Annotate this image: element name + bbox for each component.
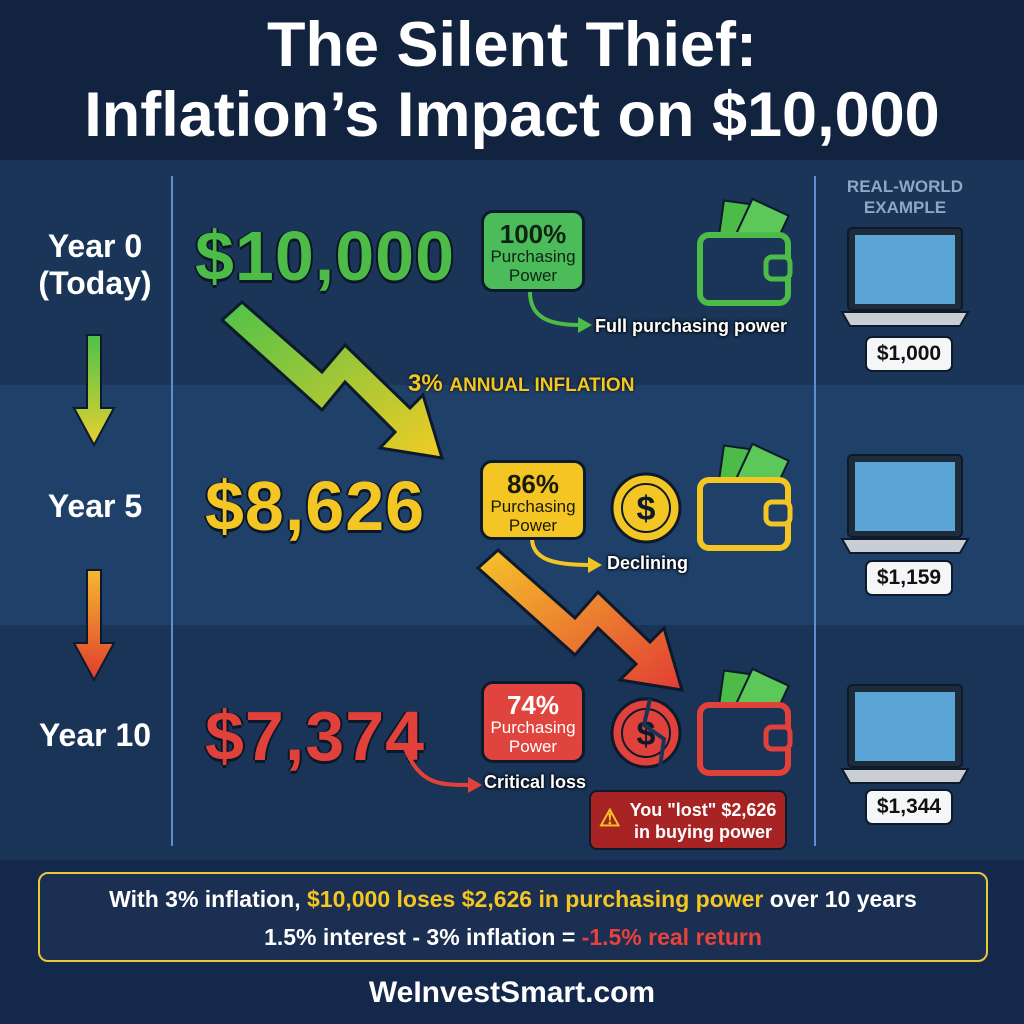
summary box: With 3% inflation, $10,000 loses $2,626 in purchasing power over 10 years bbox=[109, 886, 917, 912]
footer band bbox=[0, 860, 1024, 1024]
year labels: (Today) bbox=[38, 265, 152, 301]
footer brand: WeInvestSmart.com bbox=[369, 976, 655, 1009]
pp boxes: 100% bbox=[500, 219, 566, 249]
title bbox=[84, 10, 940, 150]
wallet icons bbox=[697, 198, 792, 306]
text: 74% bbox=[507, 690, 559, 720]
column heading: real-world example: EXAMPLE bbox=[864, 198, 946, 217]
header band bbox=[0, 0, 1024, 160]
text: Declining bbox=[607, 553, 688, 573]
price tags: $1,000 bbox=[877, 342, 941, 365]
text: Year 5 bbox=[48, 488, 142, 524]
title: Inflation’s Impact on $10,000 bbox=[84, 80, 940, 150]
text: $ bbox=[637, 715, 656, 753]
warning callout: in buying power bbox=[634, 822, 772, 842]
text: Power bbox=[509, 516, 557, 535]
pp boxes: Power bbox=[509, 266, 557, 285]
text: $1,159 bbox=[877, 566, 941, 589]
title: The Silent Thief: bbox=[267, 10, 757, 80]
pp boxes: Purchasing bbox=[490, 247, 576, 266]
notes: Full purchasing power bbox=[595, 316, 787, 336]
price tags bbox=[865, 336, 953, 372]
column heading: real-world example: REAL-WORLD bbox=[847, 177, 963, 196]
warning callout: ⚠ bbox=[599, 805, 621, 832]
text: Critical loss bbox=[484, 772, 586, 792]
summary box: 1.5% interest - 3% inflation = -1.5% real return bbox=[264, 924, 762, 950]
coin icons: $ bbox=[637, 490, 656, 528]
text: Power bbox=[509, 737, 557, 756]
left timeline arrows bbox=[72, 334, 116, 682]
row band: year 10 bbox=[0, 625, 1024, 860]
text: $8,626 bbox=[205, 467, 425, 545]
amounts: $10,000 bbox=[195, 217, 455, 295]
text: 86% bbox=[507, 469, 559, 499]
year labels bbox=[38, 228, 152, 301]
warning callout bbox=[589, 790, 787, 850]
text: $1,344 bbox=[877, 795, 941, 818]
laptops bbox=[840, 227, 970, 327]
text: $7,374 bbox=[205, 697, 425, 775]
row band: year 5 bbox=[0, 385, 1024, 625]
column heading: real-world example bbox=[847, 177, 963, 217]
pp boxes bbox=[481, 210, 585, 292]
connector arrows bbox=[530, 292, 580, 325]
text: Year 10 bbox=[39, 717, 151, 753]
coin icons bbox=[610, 472, 682, 544]
inflation label: 3% ANNUAL INFLATION bbox=[408, 370, 634, 397]
row band: year 0 bbox=[0, 160, 1024, 385]
text: Purchasing bbox=[490, 718, 576, 737]
summary box bbox=[38, 872, 988, 962]
year labels: Year 0 bbox=[48, 228, 142, 264]
warning callout: You "lost" $2,626 bbox=[630, 800, 776, 820]
text: Purchasing bbox=[490, 497, 576, 516]
